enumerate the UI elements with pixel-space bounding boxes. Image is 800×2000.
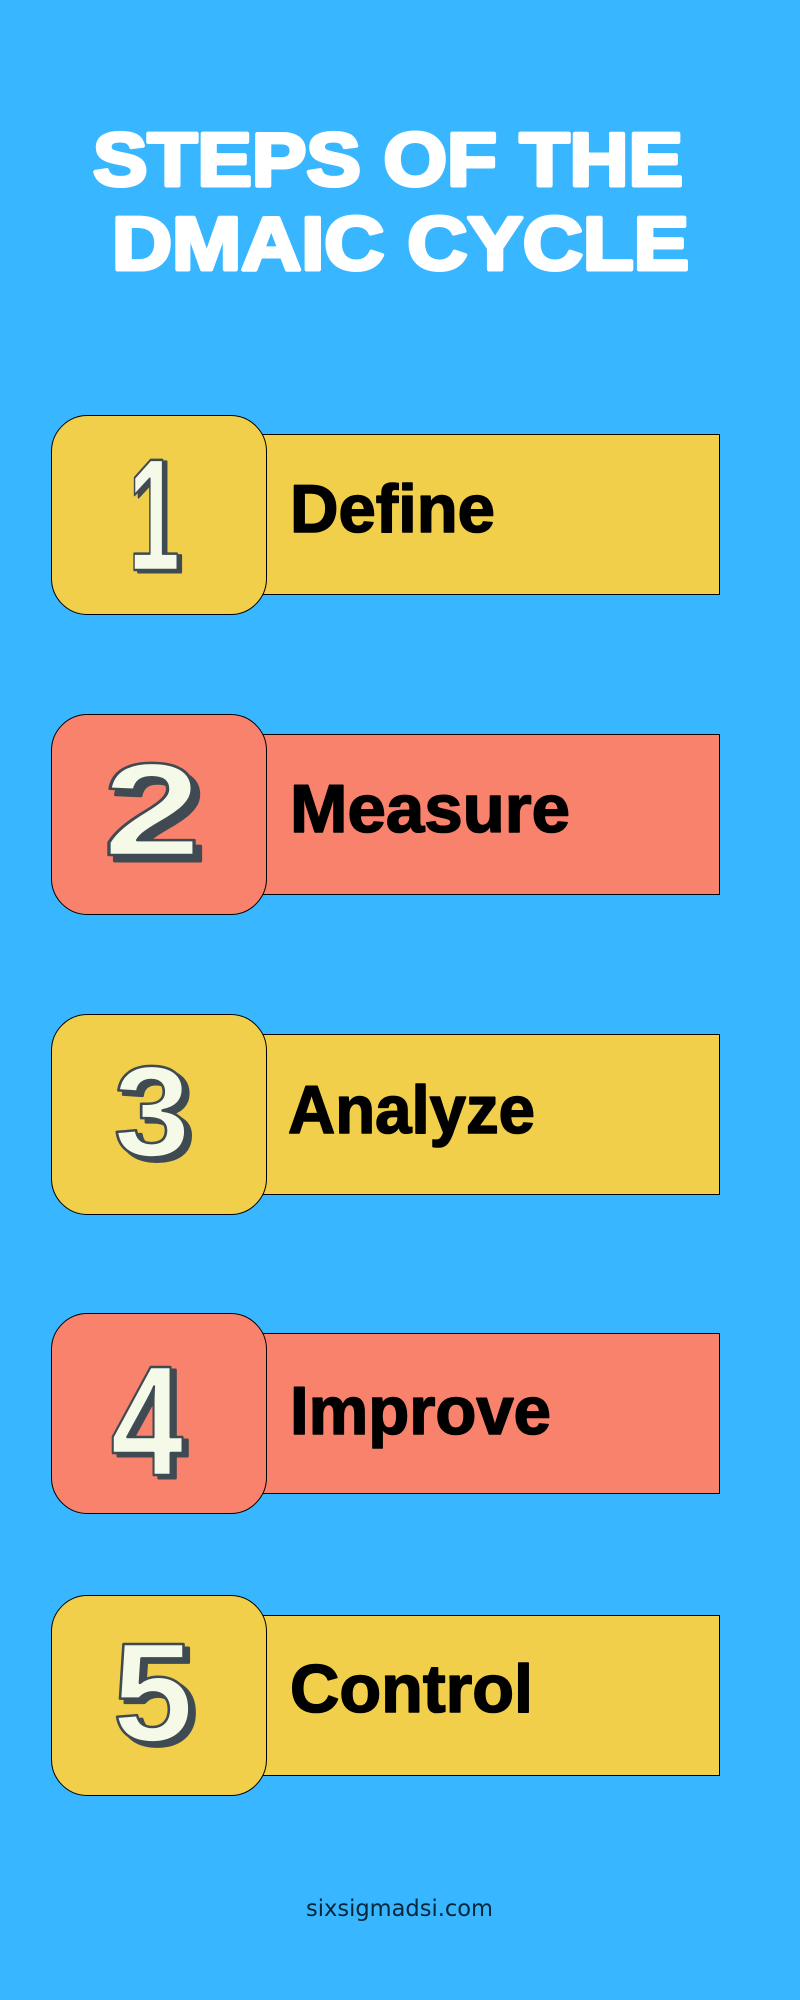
label bar: define: [240, 434, 720, 594]
label bar: analyze: [240, 1034, 720, 1194]
number badge 1: [52, 416, 266, 614]
number badge 1: 1: [128, 426, 180, 604]
label bar: improve: Improve: [290, 1373, 551, 1449]
title: DMAIC CYCLE: [112, 202, 689, 286]
number badge 2: 2: [109, 743, 207, 890]
footer url: sixsigmadsi.com: [306, 1896, 493, 1922]
number badge 3: [52, 1014, 266, 1214]
number badge 5: 5: [118, 1618, 198, 1776]
number badge 2: [52, 714, 266, 914]
label bar: control: [240, 1616, 720, 1776]
label bar: measure: [240, 734, 720, 894]
number badge 4: [52, 1314, 266, 1514]
panel: step 2 measure: [52, 714, 720, 914]
label bar: control: Control: [290, 1651, 533, 1727]
number badge 5: 5: [113, 1614, 193, 1772]
label bar: improve: [240, 1334, 720, 1494]
number badge 3: 3: [119, 1044, 195, 1188]
number badge 3: 3: [114, 1040, 190, 1184]
title: STEPS OF THE: [93, 118, 683, 202]
number badge 4: 4: [111, 1332, 183, 1509]
panel: step 4 improve: [52, 1314, 720, 1514]
panel: step 3 analyze: [52, 1014, 720, 1214]
number badge 4: 4: [116, 1335, 188, 1512]
panel: step 1 define: [52, 416, 720, 614]
number badge 5: [52, 1596, 266, 1796]
title: [93, 118, 689, 286]
number badge 1: 1: [132, 428, 184, 606]
number badge 2: 2: [103, 737, 201, 884]
label bar: analyze: Analyze: [288, 1072, 535, 1148]
label bar: define: Define: [290, 471, 495, 547]
panel: step 5 control: [52, 1596, 720, 1796]
label bar: measure: Measure: [290, 771, 570, 847]
